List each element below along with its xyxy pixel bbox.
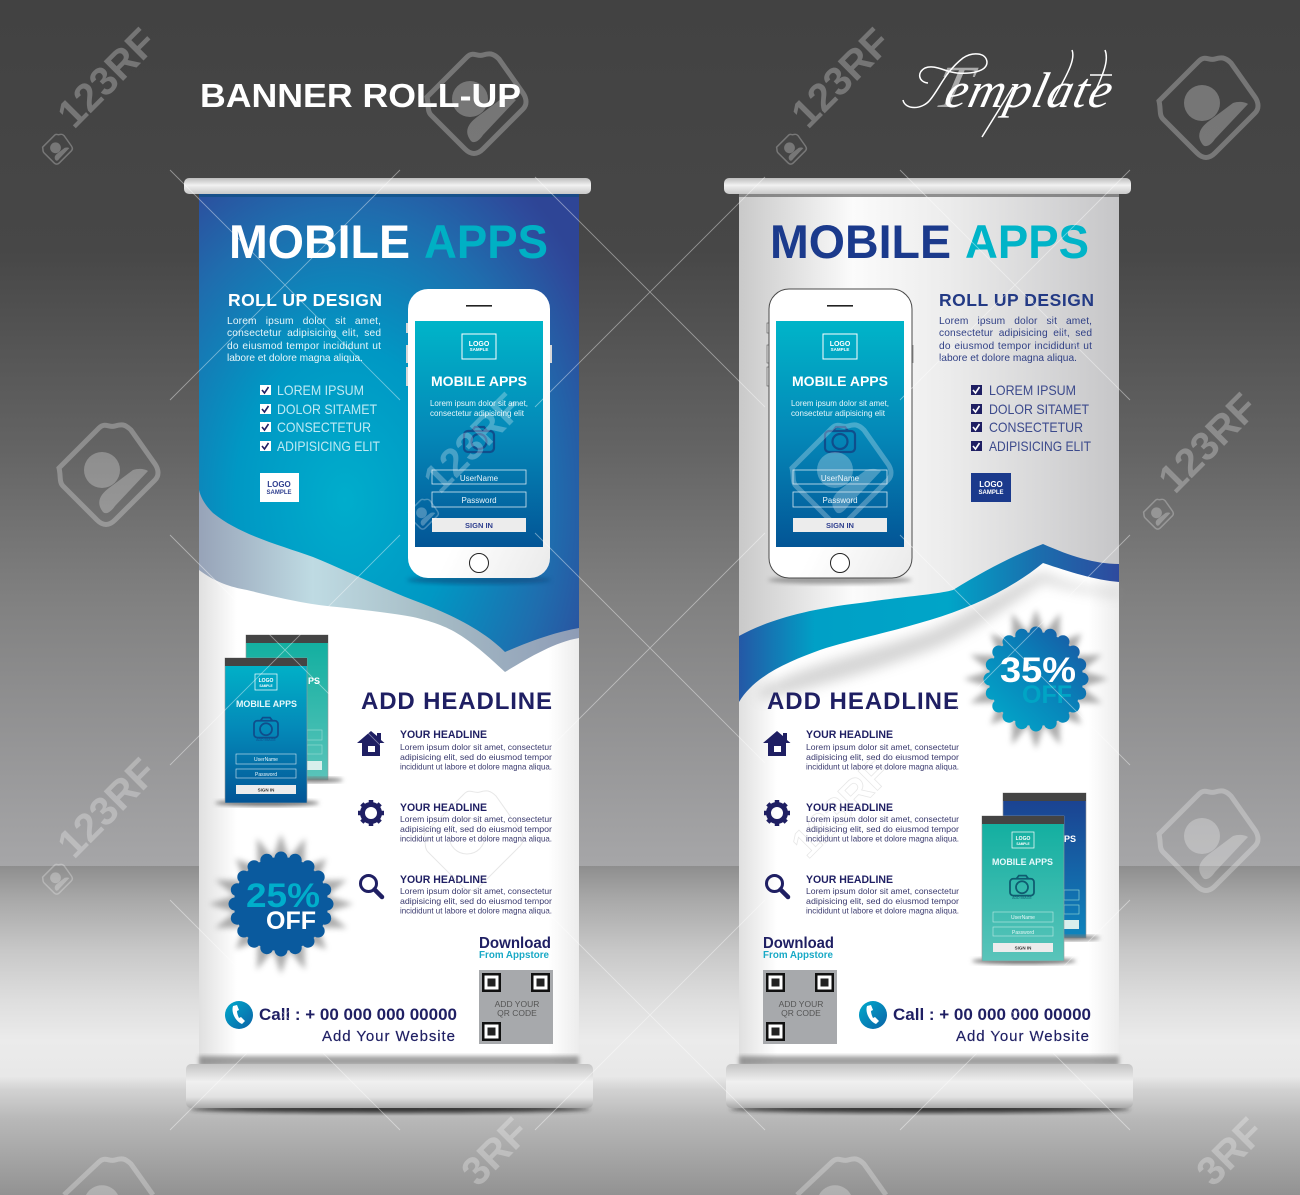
left intro text: do eiusmod tempor incididunt ut: [227, 341, 381, 352]
left discount badge: [209, 834, 353, 974]
left mini app screens: PS: [308, 676, 320, 686]
title: template script: Template: [929, 55, 1122, 121]
left feature: home: [357, 729, 552, 772]
panel: right banner: [726, 190, 1133, 1113]
right discount badge: 35%: [1000, 651, 1076, 690]
left feature: search: incididunt ut labore et dolore magna aliqua.: [400, 906, 552, 916]
left mini app screens: ADD IMAGE: [256, 738, 276, 742]
right qr code placeholder: ADD YOUR: [779, 999, 823, 1009]
left feature: search: adipisicing elit, sed do eiusmod tempor: [400, 896, 552, 906]
left checklist: [260, 382, 380, 454]
right call details: Call : + 00 000 000 00000: [893, 1005, 1091, 1024]
right mini app screens: SIGN IN: [1015, 946, 1031, 950]
right mini app screens: SAMPLE: [1016, 842, 1030, 846]
right feature: home: Lorem ipsum dolor sit amet, consectetur: [806, 742, 959, 752]
left smartphone: Password: [461, 496, 497, 505]
left heading: mobile apps: APPS: [424, 215, 548, 268]
right intro text: labore et dolore magna aliqua.: [939, 353, 1077, 364]
right smartphone: SIGN IN: [826, 521, 854, 530]
left intro text: [227, 316, 381, 364]
right qr code placeholder: [763, 970, 837, 1044]
left logo sample: [260, 473, 299, 502]
right feature: search: incididunt ut labore et dolore magna aliqua.: [806, 906, 959, 916]
right checklist: CONSECTETUR: [989, 419, 1083, 435]
right feature: home: incididunt ut labore et dolore magna aliqua.: [806, 762, 959, 772]
left mini app screens: [215, 635, 343, 806]
left smartphone: SIGN IN: [465, 521, 493, 530]
right smartphone: consectetur adipisicing elit: [791, 408, 886, 418]
icon: house: [357, 731, 384, 756]
right discount badge: [964, 609, 1108, 749]
right smartphone: LOGO: [830, 341, 851, 348]
right banner upper gray area: [739, 190, 1119, 638]
background wall: [0, 0, 1300, 866]
watermarks over banners: [409, 385, 899, 890]
left qr code placeholder: [479, 970, 553, 1044]
left qr code placeholder: ADD YOUR: [495, 999, 539, 1009]
left qr code placeholder: QR CODE: [497, 1008, 537, 1018]
right feature: search: adipisicing elit, sed do eiusmod tempor: [806, 896, 959, 906]
right mini app screens: LOGO: [1016, 836, 1030, 842]
left checklist: DOLOR SITAMET: [277, 401, 377, 417]
watermarks on background: 123RF: [49, 750, 165, 866]
right heading: mobile apps: APPS: [965, 215, 1089, 268]
right mini app screens: ADD IMAGE: [1012, 896, 1032, 900]
right heading: mobile apps: MOBILE: [770, 215, 951, 268]
left checklist: LOREM IPSUM: [277, 382, 364, 398]
watermarks on background: 123RF: [783, 20, 899, 136]
left smartphone: Lorem ipsum dolor sit amet,: [430, 398, 528, 408]
left mini app screens: LOGO: [259, 678, 273, 684]
right feature: settings: adipisicing elit, sed do eiusmod tempor: [806, 824, 959, 834]
right intro text: do eiusmod tempor incididunt ut: [939, 341, 1092, 352]
left download label: From Appstore: [479, 949, 549, 961]
right mini app screens: MOBILE APPS: [992, 857, 1053, 867]
watermarks over banners: 123RF: [783, 750, 899, 866]
right ribbon shadow: [760, 572, 1119, 700]
watermarks on background: 123RF: [49, 20, 165, 136]
left banner base stand: [186, 1056, 593, 1113]
left feature: search: [360, 874, 552, 916]
right mini app screens: [972, 793, 1100, 964]
right feature: settings: incididunt ut labore et dolore magna aliqua.: [806, 834, 959, 844]
left banner gray swoosh: [199, 470, 579, 672]
right checklist: ADIPISICING ELIT: [989, 438, 1091, 454]
left download label: Download: [479, 935, 551, 952]
right mini app screens: PS: [1064, 834, 1076, 844]
left heading: add headline: ADD HEADLINE: [361, 688, 552, 715]
right mini app screens: Password: [1012, 930, 1034, 936]
watermarks on background: 123RF: [1150, 385, 1266, 501]
icon: gear: [358, 800, 384, 826]
left checklist: ADIPISICING ELIT: [277, 438, 380, 454]
right heading: add headline: ADD HEADLINE: [767, 688, 959, 715]
left call details: Add Your Website: [322, 1028, 455, 1045]
icon: magnifier: [360, 876, 382, 897]
right discount badge: OFF: [1022, 681, 1072, 709]
title: banner roll-up: BANNER ROLL-UP: [200, 77, 521, 114]
right intro text: [939, 316, 1092, 364]
right smartphone: [767, 289, 914, 584]
right feature: home: adipisicing elit, sed do eiusmod tempor: [806, 752, 959, 762]
left smartphone: SAMPLE: [470, 347, 488, 352]
left call details: [225, 1001, 457, 1045]
left feature: home: adipisicing elit, sed do eiusmod tempor: [400, 752, 552, 762]
left feature: settings: YOUR HEADLINE: [400, 802, 487, 814]
right logo sample: SAMPLE: [978, 490, 1004, 496]
right smartphone: SAMPLE: [831, 347, 849, 352]
left smartphone: UserName: [460, 474, 499, 483]
icon: gear: [764, 800, 790, 826]
left download label: [479, 935, 551, 961]
right call details: Add Your Website: [956, 1028, 1089, 1045]
left heading: mobile apps: MOBILE: [229, 215, 410, 268]
right smartphone: Lorem ipsum dolor sit amet,: [791, 398, 889, 408]
left logo sample: SAMPLE: [266, 490, 292, 496]
right banner sheet: [739, 190, 1119, 1065]
right heading: mobile apps: [770, 215, 1089, 268]
right checklist: LOREM IPSUM: [989, 382, 1076, 398]
right feature: search: [766, 874, 959, 916]
right smartphone: Password: [822, 496, 858, 505]
left banner top bar: [184, 178, 591, 197]
icon: house: [763, 731, 790, 756]
right download label: From Appstore: [763, 949, 833, 961]
right checklist: DOLOR SITAMET: [989, 401, 1089, 417]
watermark lattice: [170, 170, 1130, 1130]
left feature: settings: Lorem ipsum dolor sit amet, consectetur: [400, 814, 552, 824]
background floor: [0, 866, 1300, 1195]
right feature: search: Lorem ipsum dolor sit amet, consectetur: [806, 886, 959, 896]
left feature: settings: adipisicing elit, sed do eiusmod tempor: [400, 824, 552, 834]
left feature: search: Lorem ipsum dolor sit amet, consectetur: [400, 886, 552, 896]
left intro text: consectetur adipisicing elit, sed: [227, 328, 381, 339]
right call details: [859, 1001, 1091, 1045]
left intro text: labore et dolore magna aliqua.: [227, 353, 363, 364]
left logo sample: LOGO: [267, 480, 291, 489]
left feature: home: YOUR HEADLINE: [400, 729, 487, 741]
left feature: home: Lorem ipsum dolor sit amet, consectetur: [400, 742, 552, 752]
left banner sheet: [199, 190, 579, 1065]
left discount badge: OFF: [266, 907, 316, 935]
right logo sample: LOGO: [979, 480, 1003, 489]
right blue ribbon: [739, 544, 1119, 702]
title: template script: [903, 50, 1122, 137]
left checklist: CONSECTETUR: [277, 419, 371, 435]
left subheading: roll up design: ROLL UP DESIGN: [228, 290, 382, 310]
right smartphone: UserName: [821, 474, 860, 483]
right qr code placeholder: QR CODE: [781, 1008, 821, 1018]
left banner blue header: [199, 193, 579, 652]
right checklist: [971, 382, 1091, 454]
watermarks on background: 3RF: [1188, 1110, 1273, 1194]
left smartphone: LOGO: [469, 341, 490, 348]
right feature: settings: [764, 800, 959, 844]
left feature: search: YOUR HEADLINE: [400, 874, 487, 886]
left mini app screens: SAMPLE: [259, 684, 273, 688]
right feature: search: YOUR HEADLINE: [806, 874, 893, 886]
left intro text: Lorem ipsum dolor sit amet,: [227, 316, 381, 327]
right feature: settings: YOUR HEADLINE: [806, 802, 893, 814]
left discount badge: 25%: [246, 877, 320, 915]
left feature: settings: [358, 800, 552, 844]
left smartphone: consectetur adipisicing elit: [430, 408, 525, 418]
right logo sample: [971, 473, 1011, 502]
right intro text: consectetur adipisicing elit, sed: [939, 328, 1092, 339]
watermarks on background: 3RF: [453, 1110, 538, 1194]
right feature: home: YOUR HEADLINE: [806, 729, 893, 741]
right download label: [763, 935, 834, 961]
left call details: Call : + 00 000 000 00000: [259, 1005, 457, 1024]
right smartphone: MOBILE APPS: [792, 374, 888, 389]
icon: magnifier: [766, 876, 788, 897]
left mini app screens: UserName: [254, 757, 278, 763]
left mini app screens: Password: [255, 772, 277, 778]
left feature: settings: incididunt ut labore et dolore magna aliqua.: [400, 834, 552, 844]
left smartphone: MOBILE APPS: [431, 374, 527, 389]
left mini app screens: SIGN IN: [258, 788, 274, 792]
right banner top bar: [724, 178, 1131, 197]
left feature: home: incididunt ut labore et dolore magna aliqua.: [400, 762, 552, 772]
right feature: settings: Lorem ipsum dolor sit amet, consectetur: [806, 814, 959, 824]
left smartphone: [406, 289, 552, 584]
watermarks over banners: 123RF: [415, 385, 531, 501]
right intro text: Lorem ipsum dolor sit amet,: [939, 316, 1092, 327]
right subheading: roll up design: ROLL UP DESIGN: [939, 290, 1094, 310]
left mini app screens: MOBILE APPS: [236, 699, 297, 709]
right banner base stand: [726, 1056, 1133, 1113]
right feature: home: [763, 729, 959, 772]
left heading: mobile apps: [229, 215, 548, 268]
panel: left banner: [186, 190, 593, 1113]
right download label: Download: [763, 935, 834, 952]
right mini app screens: UserName: [1011, 915, 1035, 921]
